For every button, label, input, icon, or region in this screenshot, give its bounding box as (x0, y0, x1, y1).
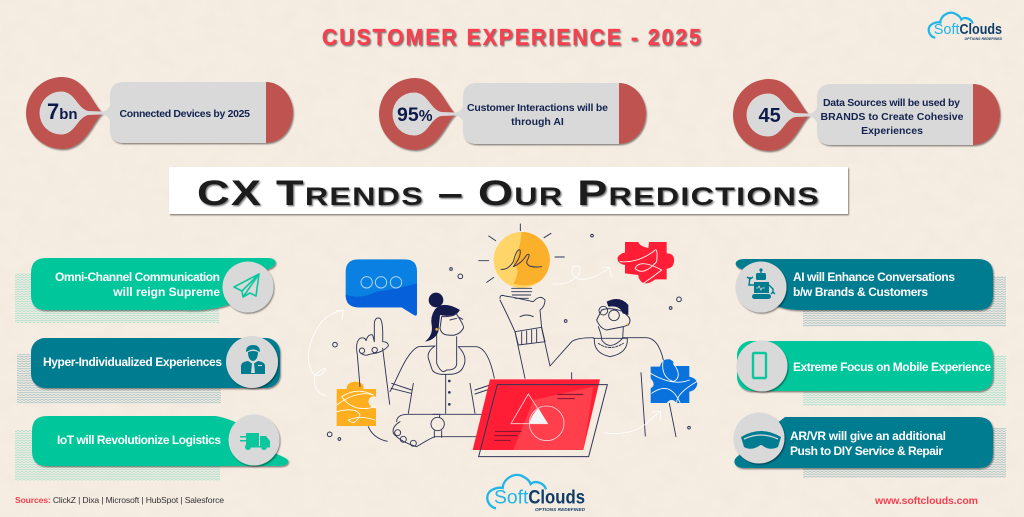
stat: 45 data sources: 45 (758, 105, 781, 127)
icon: robot (747, 268, 775, 299)
logo: bottom centre (487, 475, 586, 512)
card: omni-channel communication: will reign Supreme (112, 285, 220, 299)
stat: 45 data sources: Experiences (861, 125, 923, 137)
card: IoT logistics: IoT will Revolutionize Logistics (57, 433, 221, 447)
card: omni-channel communication: Omni-Channel Communication (55, 270, 220, 284)
stat: 45 data sources: BRANDS to Create Cohesive (821, 111, 964, 123)
man figure (500, 295, 676, 437)
stat: 7bn connected devices: Connected Devices by 2025 (120, 108, 250, 120)
card: AI conversations: b/w Brands & Customers (793, 285, 928, 299)
logo: bottom centre: Soft (494, 487, 529, 508)
puzzle piece: blue (651, 359, 697, 403)
website link: www.softclouds.com (874, 495, 978, 507)
stat: 95% customer interactions: through AI (511, 116, 564, 128)
icon: paper plane (234, 274, 259, 297)
logo: top right (929, 13, 1002, 41)
logo: bottom centre: OPTIONS REDEFINED (535, 507, 586, 512)
central illustration: team with ideas (308, 224, 697, 457)
laptop with chart (473, 379, 607, 457)
stat: 7bn connected devices (26, 77, 293, 149)
light bulb (479, 224, 564, 298)
title: CUSTOMER EXPERIENCE - 2025 (322, 24, 701, 50)
puzzle piece: red (618, 242, 674, 283)
speech bubble (346, 259, 417, 316)
card: AR/VR: AR/VR will give an additional (790, 429, 946, 443)
woman figure (357, 293, 494, 447)
card: hyper-individualized experiences (17, 336, 280, 404)
icon: AR goggles (741, 431, 781, 449)
card: mobile experience: Extreme Focus on Mobile Experience (793, 360, 991, 374)
stat: 7bn connected devices: 7bn (47, 99, 78, 124)
stat: 45 data sources (733, 79, 1000, 151)
stat: 95% customer interactions (379, 78, 646, 150)
logo: bottom centre: Clouds (528, 487, 585, 508)
icon: delivery truck (240, 433, 270, 450)
logo: top right: Soft (934, 22, 960, 38)
banner heading (169, 167, 848, 214)
puzzle piece: orange (337, 382, 376, 426)
logo: top right: OPTIONS REDEFINED (964, 37, 1002, 41)
icon: smartphone (753, 353, 766, 378)
card: AR/VR: Push to DIY Service & Repair (790, 444, 943, 458)
icon: business person (241, 345, 265, 374)
decorative arrows (308, 266, 661, 434)
card: AI conversations: AI will Enhance Conversations (793, 270, 955, 284)
stat: 95% customer interactions: Customer Interactions will be (467, 102, 608, 114)
stat: 45 data sources: Data Sources will be used by (823, 97, 960, 109)
card: mobile experience (736, 340, 1006, 406)
banner heading: CX Trends – Our Predictions (197, 174, 820, 213)
card: IoT logistics (15, 414, 288, 481)
card: AR/VR (734, 412, 1006, 478)
card: omni-channel communication (15, 258, 276, 323)
card: hyper-individualized experiences: Hyper-Individualized Experiences (43, 355, 222, 369)
sources line: Sources: ClickZ | Dixa | Microsoft | HubSpot | Salesforce (15, 495, 224, 505)
card: AI conversations (736, 259, 1006, 327)
stat: 95% customer interactions: 95% (397, 104, 433, 126)
decorative dots (327, 234, 690, 440)
logo: top right: Clouds (960, 22, 1002, 38)
